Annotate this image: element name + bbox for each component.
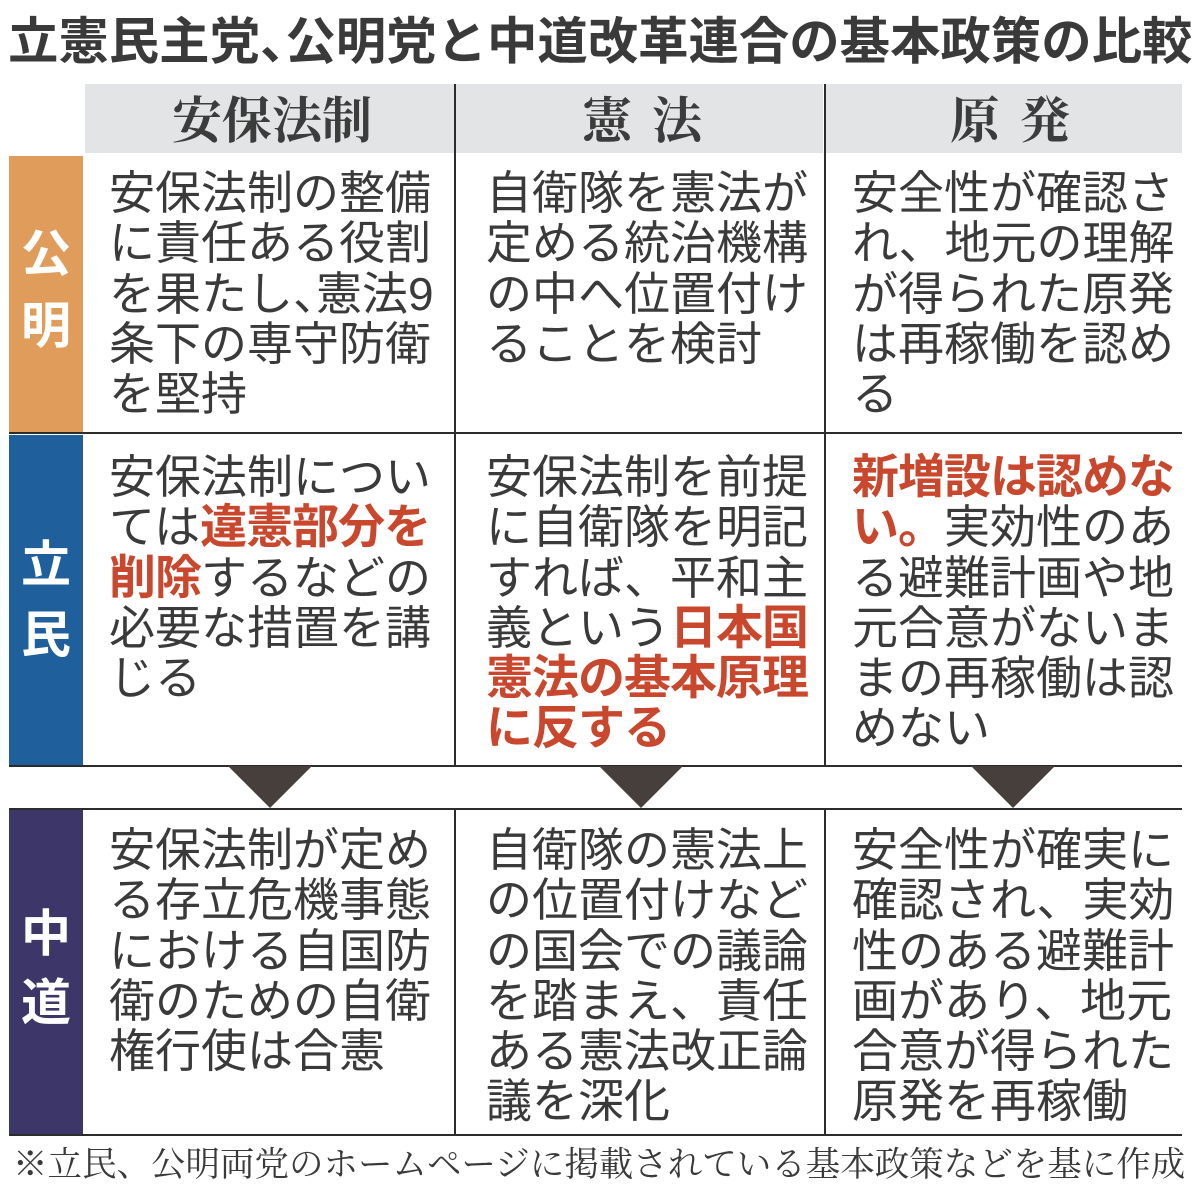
row label: 立民: 立: [21, 537, 71, 593]
title: 立憲民主党、公明党と中道改革連合の基本政策の比較: [8, 13, 1192, 70]
text: 公明 原発: れ、地元の理解: [852, 217, 1174, 269]
arrow: 安保法制: [228, 766, 312, 808]
text: 公明 憲法: 定める統治機構: [486, 217, 808, 269]
text: 中道 原発: 原発を再稼働: [852, 1075, 1128, 1127]
text: 立民 原発: めない: [852, 702, 990, 754]
text: 公明 憲法: の中へ位置付け: [486, 268, 808, 320]
footnote: ※立民、公明両党のホームページに掲載されている基本政策などを基に作成: [13, 1146, 1185, 1184]
text: 立民 安保法制: じる: [109, 652, 201, 704]
text: 中道 憲法: [486, 824, 808, 1127]
text: 中道 安保法制: [109, 824, 431, 1077]
arrow: 原発: [971, 766, 1055, 808]
text: 公明 原発: 安全性が確認さ: [852, 167, 1174, 219]
text: 立民 安保法制: ては違憲部分を: [109, 500, 430, 553]
text: 公明 安保法制: に責任ある役割: [109, 217, 431, 269]
text: 立民 安保法制: 削除するなどの: [109, 550, 431, 604]
text: 公明 憲法: ることを検討: [486, 318, 762, 370]
text: 中道 憲法: 議を深化: [486, 1075, 670, 1127]
text: 中道 憲法: を踏まえ、責任: [486, 975, 808, 1027]
text: 立民 原発: い。実効性のあ: [852, 500, 1174, 553]
text: 中道 憲法: の国会での議論: [486, 924, 808, 976]
arrow: 憲法: [599, 766, 683, 808]
row label: 中道: 中: [21, 906, 71, 962]
text: 公明 憲法: [486, 167, 808, 370]
text: 立民 憲法: 安保法制を前提: [486, 451, 808, 503]
text: 公明 安保法制: 安保法制の整備: [109, 167, 431, 219]
text: 立民 憲法: 義という日本国: [486, 601, 808, 654]
text: 公明 原発: [852, 167, 1174, 420]
text: 立民 憲法: すれば、平和主: [486, 552, 808, 604]
text: 中道 安保法制: 衛のための自衛: [109, 975, 431, 1027]
text: 立民 原発: 元合意がないま: [852, 602, 1174, 654]
column header: 原発: 原 発: [950, 93, 1070, 149]
text: 中道 安保法制: 権行使は合憲: [109, 1025, 385, 1077]
text: 中道 憲法: の位置付けなど: [486, 874, 808, 926]
row label: 公明: [9, 156, 83, 433]
text: 公明 安保法制: 条下の専守防衛: [109, 318, 431, 370]
row label: 公明: 公: [21, 226, 71, 282]
row label: 公明: 明: [21, 298, 71, 354]
text: 中道 原発: 安全性が確実に: [852, 824, 1174, 876]
text: 立民 安保法制: [109, 451, 431, 704]
text: 立民 安保法制: 安保法制につい: [109, 451, 431, 503]
text: 公明 安保法制: を堅持: [109, 368, 247, 420]
column header: 憲法: 憲 法: [582, 93, 702, 149]
text: 立民 憲法: 憲法の基本原理: [486, 651, 808, 704]
text: 公明 原発: る: [852, 368, 898, 420]
text: 中道 原発: 合意が得られた: [852, 1025, 1174, 1077]
text: 中道 原発: 画があり、地元: [852, 975, 1172, 1027]
text: 中道 安保法制: 安保法制が定め: [109, 824, 431, 876]
text: 立民 憲法: [486, 451, 808, 754]
text: 立民 原発: る避難計画や地: [852, 552, 1174, 604]
text: 中道 憲法: ある憲法改正論: [486, 1025, 808, 1077]
text: 立民 憲法: に自衛隊を明記: [486, 501, 808, 553]
text: 中道 原発: [852, 824, 1174, 1127]
text: 立民 安保法制: 必要な措置を講: [109, 602, 431, 654]
text: 公明 原発: が得られた原発: [852, 268, 1174, 320]
text: 立民 憲法: に反する: [486, 701, 670, 754]
row label: 中道: 道: [21, 975, 71, 1031]
row label: 立民: [9, 435, 83, 766]
text: 中道 原発: 性のある避難計: [852, 924, 1174, 976]
text: 公明 安保法制: [109, 167, 434, 420]
text: 立民 原発: 新増設は認めな: [852, 450, 1174, 503]
text: 公明 安保法制: を果たし、憲法9: [109, 268, 434, 320]
text: 公明 原発: は再稼働を認め: [852, 318, 1174, 370]
column header: 原発: [826, 84, 1182, 153]
text: 公明 憲法: 自衛隊を憲法が: [486, 167, 808, 219]
row label: 立民: 民: [21, 607, 71, 663]
text: 中道 安保法制: る存立危機事態: [109, 874, 431, 926]
text: 立民 原発: [852, 450, 1174, 754]
column header: 安保法制: 安保法制: [172, 93, 372, 149]
column header: 憲法: [456, 84, 823, 153]
text: 立民 原発: まの再稼働は認: [852, 652, 1174, 704]
row label: 中道: [9, 810, 83, 1135]
text: 中道 安保法制: における自国防: [109, 924, 431, 976]
column header: 安保法制: [85, 84, 454, 153]
text: 中道 憲法: 自衛隊の憲法上: [486, 824, 808, 876]
text: 中道 原発: 確認され、実効: [852, 874, 1174, 926]
